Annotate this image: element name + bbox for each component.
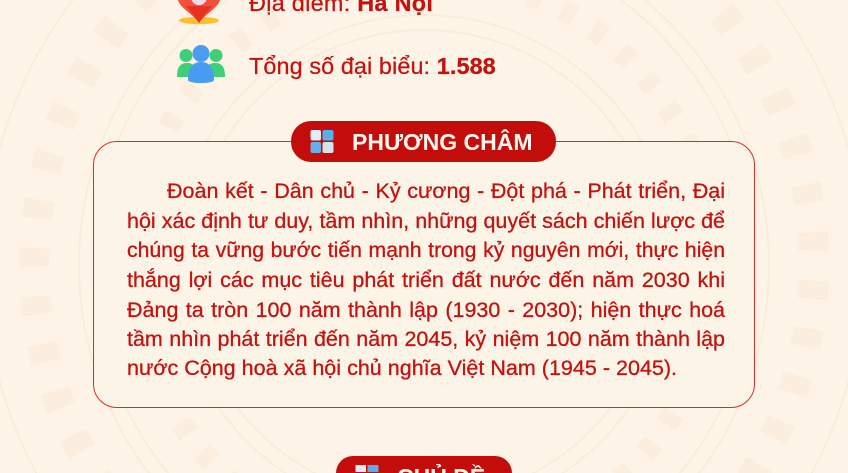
icon: grid squares [356, 465, 378, 472]
icon: delegates group [177, 45, 225, 83]
panel: phương châm [93, 141, 755, 408]
body text: phương châm paragraph: chúng ta vững bước tiến mạnh trong kỷ nguyên mới, thực hiện [127, 239, 725, 262]
heading text: PHƯƠNG CHÂM [352, 129, 533, 155]
heading pill: phương châm [291, 121, 556, 162]
body text: phương châm paragraph: nước Cộng hoà xã hội chủ nghĩa Việt Nam (1945 - 2045). [127, 356, 677, 380]
icon: location pin [178, 0, 220, 24]
body text: phương châm paragraph: hội xác định tư duy, tầm nhìn, những quyết sách chiến lược để [127, 209, 725, 233]
body text: phương châm paragraph: Đoàn kết - Dân chủ - Kỷ cương - Đột phá - Phát triển, Đại [167, 179, 725, 203]
delegates count text: Tổng số đại biểu: 1.588 [249, 53, 496, 79]
heading pill: chủ đề [336, 456, 512, 473]
body text: phương châm paragraph: thắng lợi các mục tiêu phát triển đất nước đến năm 2030 khi [127, 268, 725, 292]
icon: grid squares [310, 130, 334, 153]
body text: phương châm paragraph: Đảng ta tròn 100 năm thành lập (1930 - 2030); hiện thực hoá [127, 298, 725, 322]
body text: phương châm paragraph: tầm nhìn phát triển đến năm 2045, kỷ niệm 100 năm thành lập [127, 327, 725, 351]
